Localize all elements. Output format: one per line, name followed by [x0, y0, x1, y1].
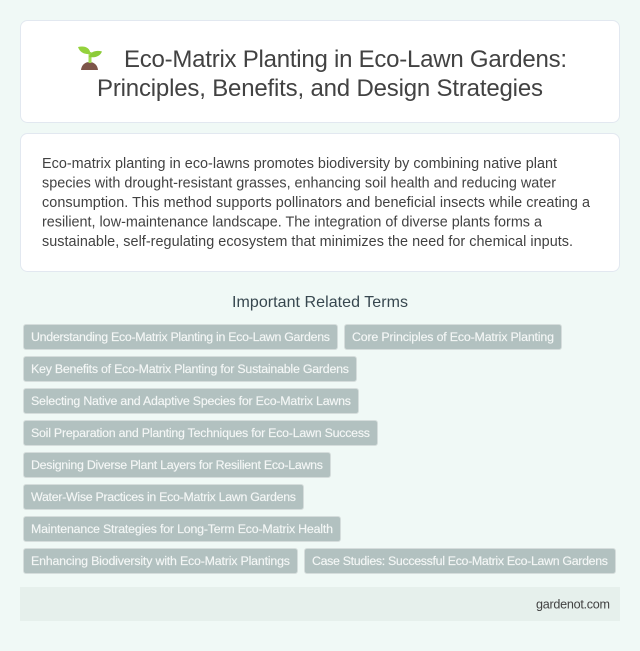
tag: [24, 356, 356, 382]
footer text: site name: gardenot.com: [536, 598, 610, 612]
panel: summary paragraph: [20, 134, 620, 272]
text block: summary: species with drought-resistant grasses, enhancing soil health and reducing water: [42, 176, 556, 192]
text block: summary: [42, 156, 590, 250]
panel: title card: [20, 20, 620, 122]
tag: Enhancing Biodiversity with Eco-Matrix Plantings: [31, 554, 290, 568]
tag: Core Principles of Eco-Matrix Planting: [352, 330, 554, 344]
tag: [344, 324, 562, 350]
title: [97, 46, 567, 102]
text block: summary: consumption. This method supports pollinators and beneficial insects while creating a: [42, 195, 590, 211]
text block: summary: resilient, low-maintenance landscape. The integration of diverse plants forms a: [42, 214, 542, 230]
tag: [24, 548, 298, 574]
title: Eco-Matrix Planting in Eco-Lawn Gardens:: [124, 46, 567, 73]
tag: Maintenance Strategies for Long-Term Eco-Matrix Health: [31, 522, 333, 536]
tag: Selecting Native and Adaptive Species for Eco-Matrix Lawns: [31, 394, 351, 408]
tag: [24, 484, 304, 510]
icon: seedling: [78, 46, 102, 70]
tag: Case Studies: Successful Eco-Matrix Eco-Lawn Gardens: [312, 554, 608, 568]
text block: summary: sustainable, self-regulating ecosystem that minimizes the need for chemical inputs.: [42, 234, 573, 250]
title: Principles, Benefits, and Design Strategies: [97, 75, 543, 102]
tag: Soil Preparation and Planting Techniques for Eco-Lawn Success: [31, 426, 370, 440]
text block: summary: Eco-matrix planting in eco-lawns promotes biodiversity by combining native plant: [42, 156, 557, 172]
tag: [24, 324, 338, 350]
tag: [24, 420, 378, 446]
tag: Key Benefits of Eco-Matrix Planting for Sustainable Gardens: [31, 362, 349, 376]
tag: [304, 548, 616, 574]
tag: Understanding Eco-Matrix Planting in Eco-Lawn Gardens: [31, 330, 330, 344]
tag: Designing Diverse Plant Layers for Resilient Eco-Lawns: [31, 458, 323, 472]
tag: Water-Wise Practices in Eco-Matrix Lawn Gardens: [31, 490, 296, 504]
tag: [24, 516, 340, 542]
tag: [24, 452, 330, 478]
tag: [24, 388, 358, 414]
footer bar: [20, 587, 620, 621]
tag list: [24, 324, 616, 574]
heading: important related terms: Important Related Terms: [232, 294, 408, 311]
